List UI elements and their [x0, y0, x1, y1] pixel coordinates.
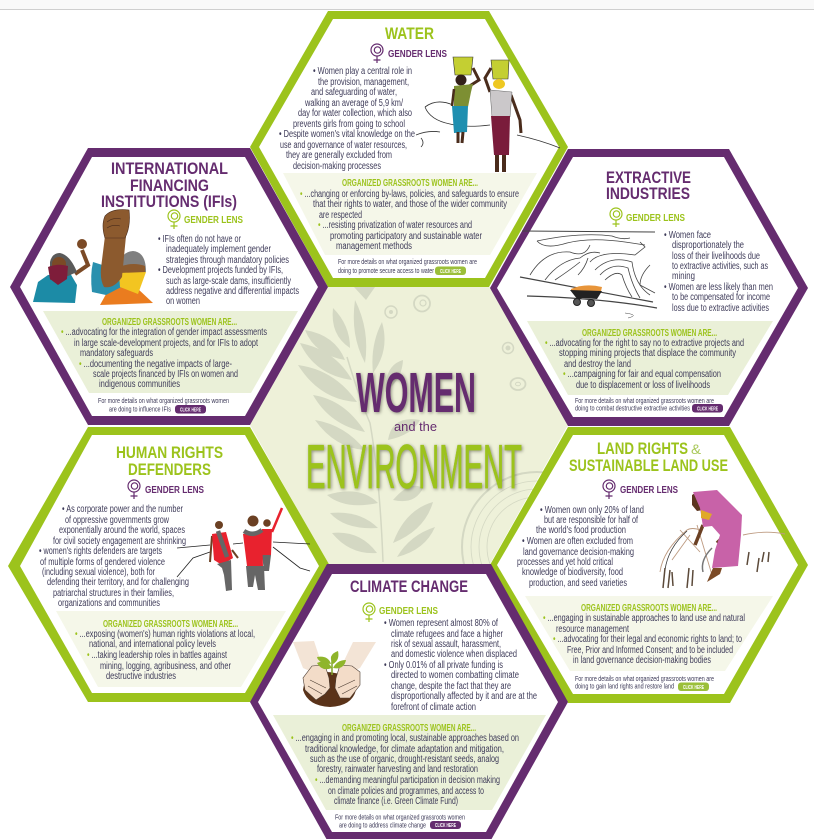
extractive title — [606, 169, 691, 203]
organized women panel: climate finance (i.e. Green Climate Fund) — [334, 796, 458, 807]
footer call to action: For more details on what organized grassroots women — [98, 396, 229, 405]
organized women panel: • ...advocating for the integration of gender impact assessments — [61, 327, 267, 338]
gender lens text: • women's rights defenders are targets — [39, 546, 162, 557]
defenders title — [116, 444, 223, 479]
gender lens text: prevents girls from going to school — [293, 119, 405, 130]
water title: WATER — [385, 25, 434, 43]
organized women panel: ORGANIZED GRASSROOTS WOMEN ARE... — [582, 328, 717, 339]
organized women panel: ORGANIZED GRASSROOTS WOMEN ARE... — [342, 723, 476, 734]
gender lens text: the provision, management, — [318, 77, 409, 88]
organized women panel: ORGANIZED GRASSROOTS WOMEN ARE... — [342, 178, 478, 189]
IFI title: INTERNATIONAL — [111, 160, 228, 178]
footer call to action: CLICK HERE — [683, 685, 704, 691]
gender lens text: • Women own only 20% of land — [540, 505, 644, 516]
organized women panel: • ...demanding meaningful participation in decision making — [315, 775, 500, 786]
illustration: woman harvesting — [660, 490, 785, 588]
organized women panel: • ...advocating for the right to say no to extractive projects and — [545, 338, 744, 349]
organized women panel: • ...advocating for their legal and economic rights to land; to — [553, 634, 742, 645]
organized women panel: management methods — [336, 241, 412, 252]
footer call to action — [575, 674, 714, 691]
gender lens text: • Women are less likely than men — [664, 282, 773, 293]
organized women panel: • ...campaigning for fair and equal compensation — [563, 369, 721, 380]
gender lens label: GENDER LENS — [388, 48, 447, 60]
organized women panel — [56, 611, 286, 687]
gender lens label: GENDER LENS — [626, 212, 685, 224]
gender lens text: strategies through mandatory policies — [166, 255, 289, 266]
organized women panel: ORGANIZED GRASSROOTS WOMEN ARE... — [103, 619, 238, 630]
organized women panel — [283, 173, 537, 255]
organized women panel: are respected — [319, 210, 362, 221]
gender lens text: to be compensated for income — [672, 292, 770, 303]
gender lens text: • As corporate power and the number — [62, 504, 183, 515]
decorative circles — [385, 296, 612, 622]
gender lens text: • Women face — [664, 230, 711, 241]
gender lens text — [39, 504, 189, 609]
organized women panel: • ...resisting privatization of water resources and — [318, 220, 472, 231]
gender lens text: on women — [166, 296, 200, 307]
footer call to action: doing to gain land rights and restore land — [575, 682, 674, 690]
panel: central title hexagon — [250, 287, 612, 622]
organized women panel — [273, 715, 546, 810]
footer call to action: CLICK HERE — [435, 823, 456, 829]
organized women panel: stopping mining projects that displace the community — [559, 348, 736, 359]
footer call to action: doing to combat destructive extractive activities — [575, 404, 690, 412]
organized women panel: national, and international policy levels — [89, 639, 216, 650]
gender lens text: production, and seed varieties — [529, 578, 627, 589]
icon: gender symbol — [128, 480, 140, 499]
gender lens text: • IFIs often do not have or — [158, 234, 241, 245]
gender lens text: of oppressive governments grow — [65, 515, 170, 526]
gender lens text: loss of their livelihoods due — [672, 251, 760, 262]
organized women panel: in land governance decision-making bodies — [573, 655, 711, 666]
organized women panel: resource management — [556, 624, 629, 635]
organized women panel: traditional knowledge, for climate adaptation and mitigation, — [305, 744, 504, 755]
footer call to action: are doing to address climate change — [339, 820, 426, 830]
organized women panel: • ...exposing (women's) human rights violations at local, — [75, 629, 255, 640]
gender lens text: risk of sexual assault, harassment, — [391, 639, 501, 650]
organized women panel: Free, Prior and Informed Consent; and to be included — [567, 645, 733, 656]
illustration: raised fists — [33, 210, 153, 305]
gender lens text: walking an average of 5,9 km/ — [304, 98, 403, 109]
organized women panel: mandatory safeguards — [80, 348, 153, 359]
icon: gender symbol — [371, 44, 383, 63]
illustration: women carrying water — [416, 57, 560, 172]
gender lens text: (including sexual violence), both for — [42, 567, 155, 578]
footer call to action: CLICK HERE — [697, 406, 718, 412]
footer call to action: For more details on what organized grassroots women are — [338, 257, 477, 266]
gender lens text: day for water collection, which also — [298, 108, 412, 119]
land rights title: SUSTAINABLE LAND USE — [569, 457, 728, 475]
IFI title: FINANCING — [130, 177, 209, 195]
organized women panel: and destroy the land — [564, 359, 631, 370]
organized women panel: indigenous communities — [99, 379, 180, 390]
footer call to action — [335, 812, 465, 830]
gender lens text: change, despite the fact that they are — [391, 681, 511, 692]
gender lens text: defending their territory, and for challenging — [47, 577, 189, 588]
footer call to action — [575, 396, 723, 412]
gender lens label: GENDER LENS — [184, 214, 243, 226]
gender lens text: the world's food production — [536, 525, 626, 536]
gender lens text: • Development projects funded by IFIs, — [158, 265, 283, 276]
gender lens text: to extractive activities, such as — [672, 261, 768, 272]
footer call to action: are doing to influence IFIs — [109, 404, 171, 414]
panel: extractive industries — [490, 149, 808, 426]
gender lens text: and domestic violence when displaced — [391, 649, 517, 660]
footer call to action: For more details on what organized grassroots women are — [575, 396, 714, 405]
gender lens text: disproportionately the — [672, 240, 744, 251]
gender lens text: use and governance of water resources, — [280, 140, 407, 151]
organized women panel: ORGANIZED GRASSROOTS WOMEN ARE... — [102, 317, 237, 328]
gender lens text — [517, 505, 644, 589]
gender lens text: patriarchal structures in their families, — [53, 588, 174, 599]
organized women panel: • ...taking leadership roles in battles against — [87, 650, 227, 661]
organized women panel: • ...changing or enforcing by-laws, policies, and safeguards to ensure — [300, 189, 519, 200]
extractive title: EXTRACTIVE — [606, 169, 691, 187]
gender lens text: mining — [672, 271, 695, 282]
gender lens text: processes and yet hold critical — [517, 557, 613, 568]
organized women panel: • ...engaging in sustainable approaches to land use and natural — [543, 613, 745, 624]
gender lens label: GENDER LENS — [379, 605, 438, 617]
panel: central title hexagon: and the — [394, 419, 437, 434]
gender lens text: knowledge of biodiversity, food — [522, 567, 623, 578]
IFI title — [101, 160, 237, 211]
IFI title: INSTITUTIONS (IFIs) — [101, 193, 237, 211]
icon: gender symbol — [610, 208, 622, 227]
footer call to action: For more details on what organized grassroots women — [335, 812, 465, 822]
organized women panel — [525, 596, 773, 671]
organized women panel: promoting participatory and sustainable water — [330, 231, 483, 242]
gender lens text: • Despite women's vital knowledge on the — [279, 129, 415, 140]
gender lens text: decision-making processes — [293, 161, 381, 172]
gender lens text — [158, 234, 299, 307]
gender lens text: and safeguarding of water, — [311, 87, 397, 98]
organized women panel: such as the use of organic, drought-resistant seeds, analog — [310, 754, 499, 765]
defenders title: HUMAN RIGHTS — [116, 444, 223, 462]
main title — [306, 361, 522, 502]
gender lens text: they are generally excluded from — [286, 150, 392, 161]
gender lens text: land governance decision-making — [523, 547, 634, 558]
gender lens text: loss due to extractive activities — [672, 303, 769, 314]
gender lens text: directed to women combatting climate — [391, 670, 519, 681]
gender lens label: GENDER LENS — [620, 484, 678, 496]
organized women panel — [43, 311, 298, 393]
gender lens text: inadequately implement gender — [166, 244, 271, 255]
gender lens text: • Women are often excluded from — [522, 536, 633, 547]
palm leaf decoration — [298, 287, 435, 562]
panel: human rights defenders — [8, 427, 330, 702]
organized women panel: scale projects financed by IFIs on women and — [93, 369, 238, 380]
land rights title: & — [691, 441, 702, 457]
panel: central title hexagon: ENVIRONMENT — [306, 433, 522, 502]
defenders title: DEFENDERS — [128, 461, 211, 479]
footer call to action — [338, 257, 477, 275]
gender lens text: • Only 0.01% of all private funding is — [384, 660, 503, 671]
main title: WOMEN — [356, 361, 476, 425]
panel: climate change — [250, 564, 568, 839]
gender lens text: such as large-scale dams, insufficiently — [166, 276, 291, 287]
gender lens text — [664, 230, 773, 314]
panel: international financing institutions — [10, 148, 328, 425]
gender lens label: GENDER LENS — [145, 484, 204, 496]
organized women panel: that their rights to water, and those of the wider community — [313, 199, 507, 210]
gender lens text — [384, 618, 537, 713]
gender lens text: forefront of climate action — [391, 702, 476, 713]
panel: water — [250, 11, 568, 287]
gender lens text: exponentially around the world, spaces — [59, 525, 185, 536]
illustration: hands and seedling — [293, 641, 376, 707]
climate title: CLIMATE CHANGE — [350, 578, 468, 596]
icon: gender symbol — [603, 480, 615, 499]
footer call to action — [98, 396, 229, 414]
organized women panel: forestry, rainwater harvesting and land restoration — [317, 764, 478, 775]
organized women panel: on climate policies and programmes, and access to — [328, 786, 484, 797]
organized women panel: ORGANIZED GRASSROOTS WOMEN ARE... — [581, 603, 717, 614]
organized women panel: mining, logging, agribusiness, and other — [100, 661, 231, 672]
organized women panel — [527, 321, 773, 395]
gender lens text — [279, 66, 415, 172]
illustration: mining landscape and truck — [520, 231, 657, 318]
gender lens text: • Women represent almost 80% of — [384, 618, 498, 629]
illustration: women defenders walking — [177, 508, 310, 591]
gender lens text: but are responsible for half of — [544, 515, 638, 526]
gender lens text: organizations and communities — [58, 598, 160, 609]
icon: gender symbol — [363, 603, 375, 622]
land rights title — [569, 440, 728, 475]
organized women panel: • ...engaging in and promoting local, sustainable approaches based on — [291, 733, 519, 744]
footer call to action: doing to promote secure access to water — [338, 266, 434, 275]
organized women panel: due to displacement or loss of livelihoods — [576, 380, 710, 391]
extractive title: INDUSTRIES — [606, 185, 690, 203]
organized women panel: destructive industries — [106, 671, 176, 682]
gender lens text: • Women play a central role in — [313, 66, 412, 77]
footer call to action: CLICK HERE — [440, 269, 461, 275]
gender lens text: climate refugees and face a higher — [391, 629, 503, 640]
land rights title: LAND RIGHTS — [597, 440, 688, 458]
gender lens text: disproportionally affected by it and are at the — [391, 691, 537, 702]
panel: land rights and sustainable land use — [490, 427, 808, 703]
organized women panel: in large scale-development projects, and for IFIs to adopt — [74, 338, 258, 349]
gender lens text: of multiple forms of gendered violence — [40, 557, 165, 568]
footer call to action: CLICK HERE — [180, 408, 201, 414]
gender lens text: address negative and differential impacts — [166, 286, 299, 297]
organized women panel: • ...documenting the negative impacts of large- — [79, 359, 232, 370]
footer call to action: For more details on what organized grassroots women are — [575, 674, 714, 683]
icon: gender symbol — [168, 210, 180, 229]
gender lens text: for civil society engagement are shrinking — [53, 536, 186, 547]
